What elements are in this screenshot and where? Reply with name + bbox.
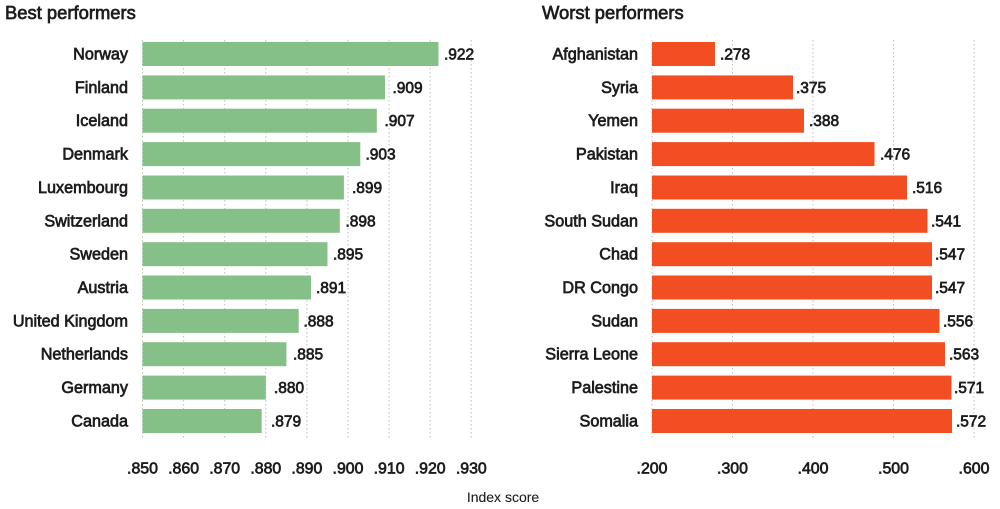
row: Sweden: .895 <box>333 247 363 264</box>
row: Finland: .909 <box>392 80 423 97</box>
axis: best performers: .930 <box>456 460 487 478</box>
row: Syria <box>601 75 826 99</box>
row: Norway <box>73 42 474 66</box>
axis: worst performers <box>637 460 990 478</box>
row: Sweden <box>70 242 363 266</box>
row: Iceland <box>76 109 415 133</box>
row: Somalia <box>580 409 986 433</box>
row: Chad <box>599 242 965 266</box>
row: Austria <box>78 276 346 300</box>
row: Yemen: .388 <box>809 113 839 130</box>
row: Switzerland: Switzerland <box>44 212 128 230</box>
row: United Kingdom <box>13 309 334 333</box>
row: Iraq: Iraq <box>610 179 638 197</box>
axis: best performers: .920 <box>415 460 446 478</box>
row: DR Congo: DR Congo <box>562 279 638 297</box>
row: Iraq <box>610 176 942 200</box>
row: Iceland: Iceland <box>76 112 128 130</box>
row: Canada <box>71 409 301 433</box>
axis title: index score: Index score <box>467 489 539 505</box>
axis: best performers <box>127 460 487 478</box>
axis: best performers: .870 <box>209 460 240 478</box>
axis: best performers: .860 <box>168 460 199 478</box>
row: United Kingdom: United Kingdom <box>13 312 128 330</box>
row: Austria: .891 <box>316 280 346 297</box>
row: Sierra Leone: .563 <box>949 347 979 364</box>
row: Syria: .375 <box>796 80 826 97</box>
row: United Kingdom: .888 <box>304 313 334 330</box>
row: Netherlands: Netherlands <box>41 346 128 364</box>
row: Pakistan: Pakistan <box>576 146 638 164</box>
heading: worst performers: Worst performers <box>542 2 684 23</box>
row: Iraq: .516 <box>912 180 942 197</box>
axis: worst performers: .600 <box>959 460 990 478</box>
row: Chad: .547 <box>935 247 965 264</box>
row: Canada: .879 <box>271 414 301 430</box>
axis: best performers: .900 <box>333 460 364 478</box>
row: Finland <box>75 75 423 99</box>
panel: worst performers <box>542 2 990 478</box>
row: Sweden: Sweden <box>70 246 128 264</box>
row: Switzerland: .898 <box>346 213 376 230</box>
row: South Sudan: South Sudan <box>544 212 638 230</box>
row: Austria: Austria <box>78 279 128 297</box>
row: Canada: Canada <box>71 412 128 430</box>
row: Syria: Syria <box>601 79 638 97</box>
row: South Sudan <box>544 209 961 233</box>
row: Palestine: Palestine <box>571 379 638 397</box>
row: Luxembourg: .899 <box>352 180 382 197</box>
row: Norway: .922 <box>444 46 474 64</box>
row: Finland: Finland <box>75 79 128 97</box>
row: Luxembourg: Luxembourg <box>38 179 128 197</box>
row: Yemen <box>588 109 839 133</box>
heading: best performers: Best performers <box>5 2 136 23</box>
row: Netherlands: .885 <box>293 347 323 364</box>
row: Palestine <box>571 376 984 400</box>
row: Palestine: .571 <box>954 380 984 397</box>
row: Luxembourg <box>38 176 382 200</box>
row: Somalia: Somalia <box>580 412 638 430</box>
row: Denmark <box>62 142 396 166</box>
row: South Sudan: .541 <box>931 213 961 230</box>
row: Afghanistan: Afghanistan <box>552 46 638 64</box>
row: Sierra Leone: Sierra Leone <box>545 346 638 364</box>
axis: worst performers: .300 <box>717 460 748 478</box>
row: Chad: Chad <box>599 246 638 264</box>
row: Denmark: Denmark <box>62 146 129 164</box>
row: DR Congo: .547 <box>935 280 965 297</box>
row: Yemen: Yemen <box>588 112 638 130</box>
row: DR Congo <box>562 276 965 300</box>
row: Sudan: .556 <box>943 313 973 330</box>
row: Switzerland <box>44 209 376 233</box>
row: Sierra Leone <box>545 342 979 366</box>
axis: worst performers: .200 <box>637 460 668 478</box>
row: Denmark: .903 <box>366 147 396 164</box>
axis: worst performers: .500 <box>878 460 909 478</box>
row: Pakistan: .476 <box>880 147 910 164</box>
row: Sudan: Sudan <box>591 312 638 330</box>
axis: best performers: .910 <box>374 460 405 478</box>
row: Germany: .880 <box>274 380 305 397</box>
row: Norway: Norway <box>73 46 129 64</box>
row: Germany: Germany <box>61 379 129 397</box>
row: Germany <box>61 376 305 400</box>
axis: worst performers: .400 <box>798 460 829 478</box>
row: Iceland: .907 <box>384 113 415 130</box>
row: Somalia: .572 <box>956 414 986 430</box>
row: Netherlands <box>41 342 323 366</box>
axis: best performers: .890 <box>291 460 323 478</box>
axis: best performers: .880 <box>250 460 281 478</box>
axis: best performers: .850 <box>127 460 158 478</box>
panel: best performers <box>5 2 487 478</box>
row: Afghanistan: .278 <box>720 46 750 64</box>
row: Pakistan <box>576 142 910 166</box>
row: Sudan <box>591 309 973 333</box>
row: Afghanistan <box>552 42 750 66</box>
